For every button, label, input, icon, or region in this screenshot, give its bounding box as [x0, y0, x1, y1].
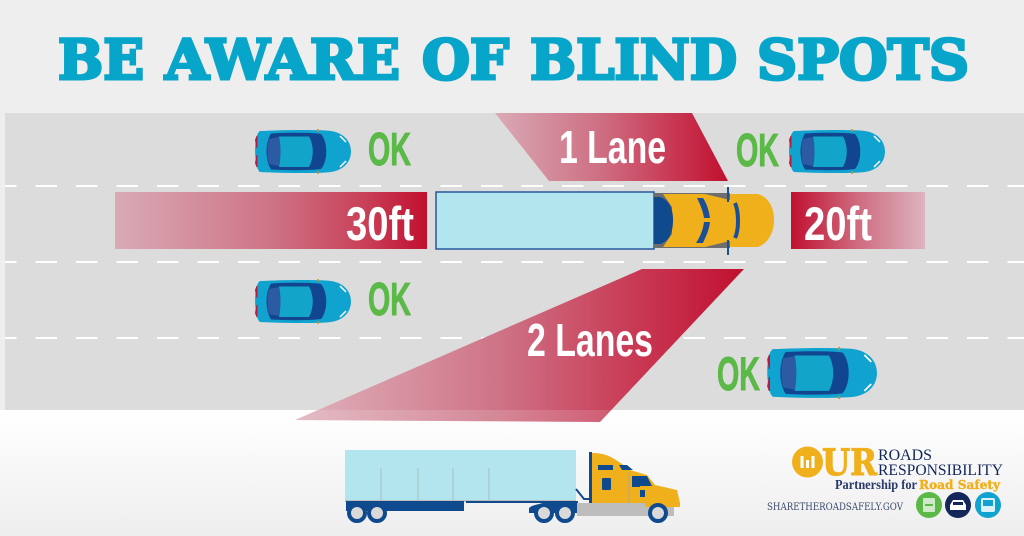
car top right: [789, 129, 885, 174]
title: AWARE: [164, 27, 400, 92]
logo: [767, 442, 1003, 518]
logo partnership line: Partnership for: [835, 478, 917, 493]
truck top view: [436, 187, 774, 255]
truck side view: [345, 450, 680, 521]
blind spot: 2 lanes right side: [295, 269, 744, 422]
road: [5, 113, 1024, 410]
blind spot: rear 30ft: [115, 192, 427, 250]
label OK middle left: OK: [368, 273, 411, 325]
title: SPOTS: [757, 27, 969, 92]
label OK top left: OK: [368, 123, 411, 175]
bottom band: [0, 410, 1024, 536]
blind spot: 1 lane left side: 1 Lane: [559, 121, 666, 173]
icon: car badge: [945, 492, 971, 518]
logo OUR: [792, 442, 878, 484]
icon: bus badge: [975, 492, 1001, 518]
logo OUR: UR: [822, 442, 878, 484]
car bottom right: [767, 347, 877, 399]
blind spot: front 20ft: [791, 192, 925, 250]
car top left: [255, 129, 351, 174]
blind spot: rear 30ft: 30ft: [346, 197, 414, 250]
title: OF: [422, 27, 509, 92]
icon: truck badge: [916, 492, 942, 518]
logo: RESPONSIBILITY: [878, 462, 1003, 479]
logo: Road Safety: [919, 478, 1001, 492]
label OK top right: OK: [736, 124, 779, 176]
car middle left: [255, 279, 351, 324]
cab: [654, 187, 774, 255]
blind spot: 1 lane left side: [495, 113, 728, 181]
label OK bottom right: OK: [717, 347, 760, 400]
title: BE: [58, 27, 144, 92]
website: SHARETHEROADSAFELY.GOV: [767, 502, 904, 513]
blind spot: front 20ft: 20ft: [804, 197, 872, 250]
title: BLIND: [530, 27, 737, 92]
logo wordmark: ROADS: [878, 447, 932, 464]
blind spot: 2 lanes right side: 2 Lanes: [527, 314, 653, 366]
trailer: [436, 192, 654, 249]
wheels: [349, 505, 666, 521]
